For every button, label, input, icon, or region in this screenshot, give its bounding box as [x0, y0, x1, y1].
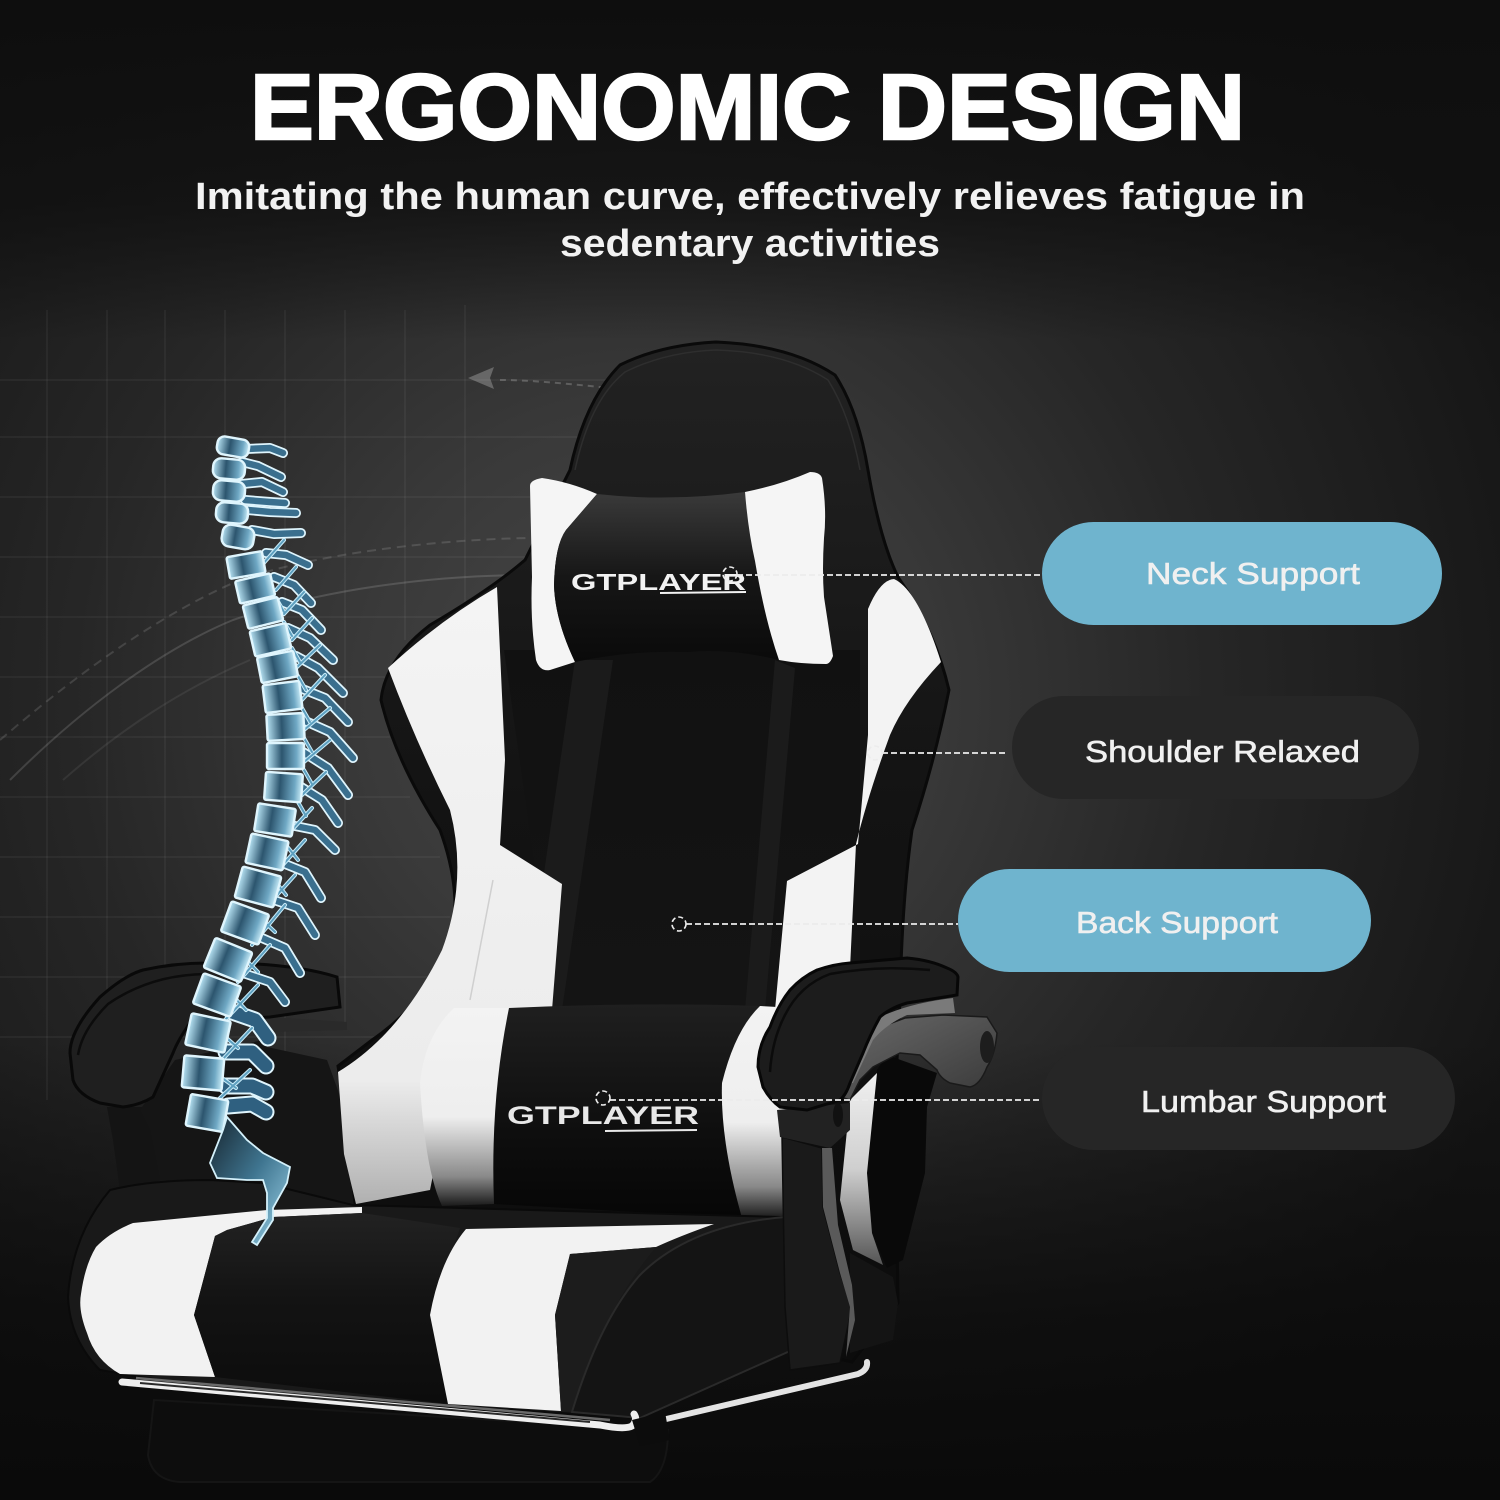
callout: back support [672, 869, 1371, 972]
chair [68, 342, 997, 1482]
callout: neck support [723, 522, 1442, 625]
left white wing [338, 587, 562, 1204]
chair back shell [338, 342, 949, 1362]
logo: lumbar: GTPLAYER [507, 1102, 699, 1130]
footrest [148, 1400, 668, 1482]
articular wings [218, 540, 330, 1098]
callout: back support: Back Support [1076, 905, 1278, 940]
spinous processes [240, 448, 353, 1002]
right white strip [840, 1073, 883, 1265]
left armrest [70, 963, 356, 1204]
right black side panel [867, 1055, 937, 1268]
arm hinge [777, 1103, 850, 1148]
seat: white left panel [80, 1207, 362, 1377]
blueprint grid [0, 305, 610, 1100]
subtitle [195, 176, 1305, 265]
centre panel and straps [504, 650, 860, 1010]
seat: right bolster [555, 1247, 656, 1412]
vertebrae [182, 435, 305, 1132]
seat: white right panel [430, 1224, 714, 1411]
arrow: blueprint arrowhead [468, 367, 494, 389]
arm strip [840, 998, 955, 1085]
lower side panel [850, 1253, 898, 1353]
seat: black centre panel [194, 1213, 460, 1404]
callout: lumbar support [596, 1047, 1455, 1150]
subtitle: Imitating the human curve, effectively relieves fatigue in [195, 176, 1305, 218]
seat [68, 1180, 790, 1418]
title: ERGONOMIC DESIGN [250, 55, 1245, 159]
spine [182, 435, 353, 1245]
callout: neck support: Neck Support [1146, 556, 1360, 591]
right armrest [758, 958, 997, 1370]
sacrum and tailbone [210, 1117, 290, 1245]
subtitle: sedentary activities [560, 223, 940, 265]
logo: pillow: GTPLAYER [571, 569, 747, 595]
headrest seam [575, 350, 860, 470]
arm pad [758, 958, 958, 1110]
lumbar pillow [420, 1004, 800, 1218]
arm post sliver [822, 1148, 855, 1357]
left arm post [107, 1107, 162, 1190]
callout: lumbar support: Lumbar Support [1141, 1084, 1386, 1119]
arm post [782, 1137, 852, 1370]
chrome footrest bar [122, 1362, 867, 1446]
arm support [835, 1015, 997, 1100]
callout: shoulder relaxed: Shoulder Relaxed [1085, 734, 1360, 769]
callout: shoulder relaxed [868, 696, 1419, 799]
neck pillow [530, 472, 833, 670]
left arm pad [70, 963, 340, 1107]
right white wing [775, 579, 941, 1010]
